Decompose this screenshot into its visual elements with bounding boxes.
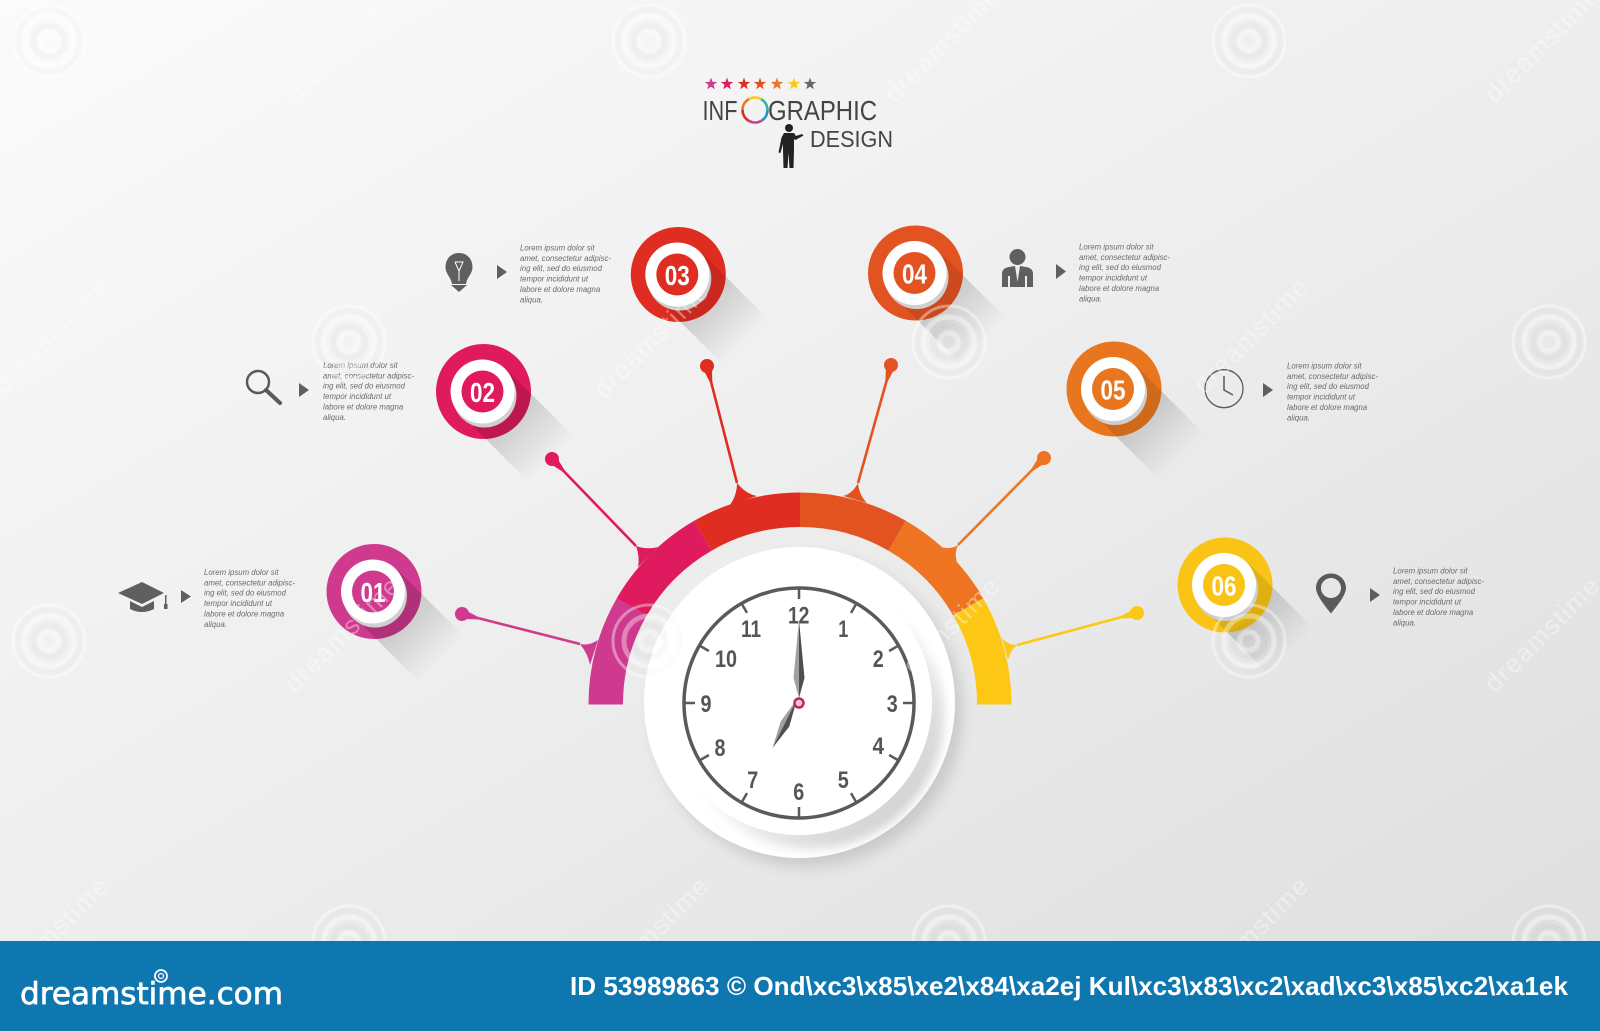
- text block 04: amet, consectetur adipisc-: [1079, 253, 1170, 262]
- badge 06: [1178, 538, 1305, 662]
- letter O colour ring: [738, 93, 772, 127]
- connector lines and pins: [455, 358, 1144, 665]
- step 03: [446, 227, 759, 356]
- text block 01: tempor incididunt ut: [204, 599, 273, 608]
- clock numerals: 6: [793, 779, 804, 806]
- badge 05: [1066, 342, 1194, 470]
- icon: light bulb: [446, 253, 472, 292]
- watermark overlay: dreamstime: [1187, 871, 1314, 998]
- connector 03: [700, 359, 757, 505]
- text block 04: ing elit, sed do eiusmod: [1079, 263, 1162, 272]
- text block 02: amet, consectetur adipisc-: [323, 371, 414, 380]
- icon: map pin: [1316, 574, 1346, 614]
- arc segment 05: [888, 521, 983, 616]
- connector 04: [843, 358, 898, 503]
- text block 01: labore et dolore magna: [204, 609, 285, 618]
- clock numerals: 4: [873, 733, 884, 760]
- clock numerals: 2: [873, 646, 884, 673]
- hour hand: [772, 699, 797, 748]
- watermark overlay: dreamstime: [1187, 272, 1314, 399]
- icon: magnifier: [247, 371, 280, 403]
- text block 05: aliqua.: [1287, 413, 1310, 422]
- text block 04: labore et dolore magna: [1079, 284, 1160, 293]
- clock numerals: 11: [741, 616, 761, 643]
- step 02: [246, 344, 564, 472]
- text block 05: labore et dolore magna: [1287, 403, 1368, 412]
- watermark overlay: dreamstime: [587, 277, 714, 404]
- rating stars: [705, 78, 816, 89]
- footer bar: [0, 941, 1600, 1031]
- step 01: [118, 544, 454, 672]
- text block 02: ing elit, sed do eiusmod: [323, 382, 406, 391]
- icon: clock: [1205, 370, 1243, 408]
- clock numerals: 12: [788, 602, 809, 630]
- text block 03: ing elit, sed do eiusmod: [520, 264, 603, 273]
- text block 04: tempor incididunt ut: [1079, 274, 1148, 283]
- badge 04: [868, 226, 996, 349]
- clock numerals: 9: [700, 691, 712, 718]
- text block 04: aliqua.: [1079, 294, 1102, 303]
- badge 02: 02: [470, 377, 495, 408]
- footer credit: ID 53989863 © Ond\xc3\x85\xe2\x84\xa2ej Kul\xc3\x83\xc2\xad\xc3\x85\xc2\xa1ek: [570, 971, 1569, 1001]
- badge 01: [326, 544, 454, 672]
- outer white disc: [644, 547, 955, 858]
- step 06: [1178, 538, 1484, 662]
- icon: graduation cap: [118, 582, 168, 612]
- heading text DESIGN: DESIGN: [810, 126, 893, 152]
- arc segment 04: [800, 492, 906, 551]
- watermark overlay: dreamstime: [587, 871, 714, 998]
- text block 02: tempor incididunt ut: [323, 392, 392, 401]
- text block 01: Lorem ipsum dolor sit: [204, 568, 279, 577]
- clock ticks: [684, 588, 914, 818]
- clock face ring: [684, 588, 914, 818]
- clock numerals: 8: [714, 735, 726, 762]
- semicircular colour arc: [588, 492, 1012, 704]
- minute hand: [794, 620, 804, 698]
- clock numerals: [700, 602, 898, 806]
- badge 01: 01: [360, 577, 386, 608]
- connector 06: [1002, 606, 1144, 660]
- text block 01: amet, consectetur adipisc-: [204, 578, 295, 587]
- arc segment 02: [617, 521, 712, 616]
- icon: businessman: [1002, 249, 1033, 287]
- text block 02: aliqua.: [323, 413, 346, 422]
- step 04: [868, 226, 1170, 349]
- clock hub: [794, 698, 804, 708]
- badge 05: 05: [1100, 374, 1126, 406]
- text block 01: aliqua.: [204, 620, 227, 629]
- title: infographic design: [702, 78, 893, 168]
- connector 02: [545, 452, 658, 567]
- clock numerals: 5: [838, 767, 849, 794]
- text block 06: ing elit, sed do eiusmod: [1393, 587, 1476, 596]
- footer logo: dreamstime.com: [20, 977, 283, 1012]
- text block 03: tempor incididunt ut: [520, 275, 589, 284]
- arrow 04: [1056, 264, 1066, 279]
- clock numerals: 7: [747, 767, 758, 794]
- arc segment 06: [953, 598, 1012, 704]
- text block 06: labore et dolore magna: [1393, 608, 1474, 617]
- arc segment 03: [694, 492, 800, 551]
- badge 03: 03: [665, 260, 690, 291]
- heading text INF: INF: [702, 95, 738, 126]
- arc segment 01: [588, 598, 647, 704]
- outer disc shadow: [653, 557, 963, 867]
- text block 03: amet, consectetur adipisc-: [520, 254, 611, 263]
- arrow 02: [299, 383, 309, 397]
- text block 03: aliqua.: [520, 295, 543, 304]
- arrow 01: [181, 590, 191, 603]
- clock numerals: 10: [715, 646, 737, 673]
- text block 03: Lorem ipsum dolor sit: [520, 244, 595, 252]
- clock numerals: 3: [887, 691, 898, 718]
- text block 02: Lorem ipsum dolor sit: [323, 361, 398, 370]
- text block 05: ing elit, sed do eiusmod: [1287, 382, 1370, 391]
- text block 05: amet, consectetur adipisc-: [1287, 372, 1378, 381]
- connector 05: [942, 451, 1051, 562]
- watermark overlay: dreamstime: [278, 571, 405, 698]
- inner disc shadow: [722, 633, 948, 852]
- connector 01: [455, 607, 598, 665]
- clock: [644, 547, 963, 867]
- badge 03: [630, 227, 759, 356]
- heading text GRAPHIC: GRAPHIC: [768, 95, 877, 126]
- watermark overlay: dreamstime: [878, 571, 1005, 698]
- inner white disc: [666, 569, 932, 835]
- text block 06: Lorem ipsum dolor sit: [1393, 566, 1468, 576]
- badge 04: 04: [902, 258, 927, 290]
- text block 06: amet, consectetur adipisc-: [1393, 577, 1484, 586]
- text block 04: Lorem ipsum dolor sit: [1079, 242, 1154, 252]
- text block 05: tempor incididunt ut: [1287, 393, 1356, 402]
- badge 02: [436, 344, 564, 472]
- arrow 05: [1263, 383, 1273, 397]
- text block 02: labore et dolore magna: [323, 402, 404, 411]
- text block 05: Lorem ipsum dolor sit: [1287, 362, 1362, 370]
- clock numerals: 1: [838, 616, 848, 643]
- text block 01: ing elit, sed do eiusmod: [204, 589, 287, 598]
- text block 06: tempor incididunt ut: [1393, 598, 1462, 607]
- badge 06: 06: [1212, 570, 1236, 602]
- text block 03: labore et dolore magna: [520, 285, 601, 294]
- step 05: [1066, 342, 1378, 482]
- arrow 06: [1370, 588, 1380, 602]
- text block 06: aliqua.: [1393, 618, 1416, 627]
- arrow 03: [497, 265, 507, 279]
- icon: presenter figure: [778, 124, 804, 168]
